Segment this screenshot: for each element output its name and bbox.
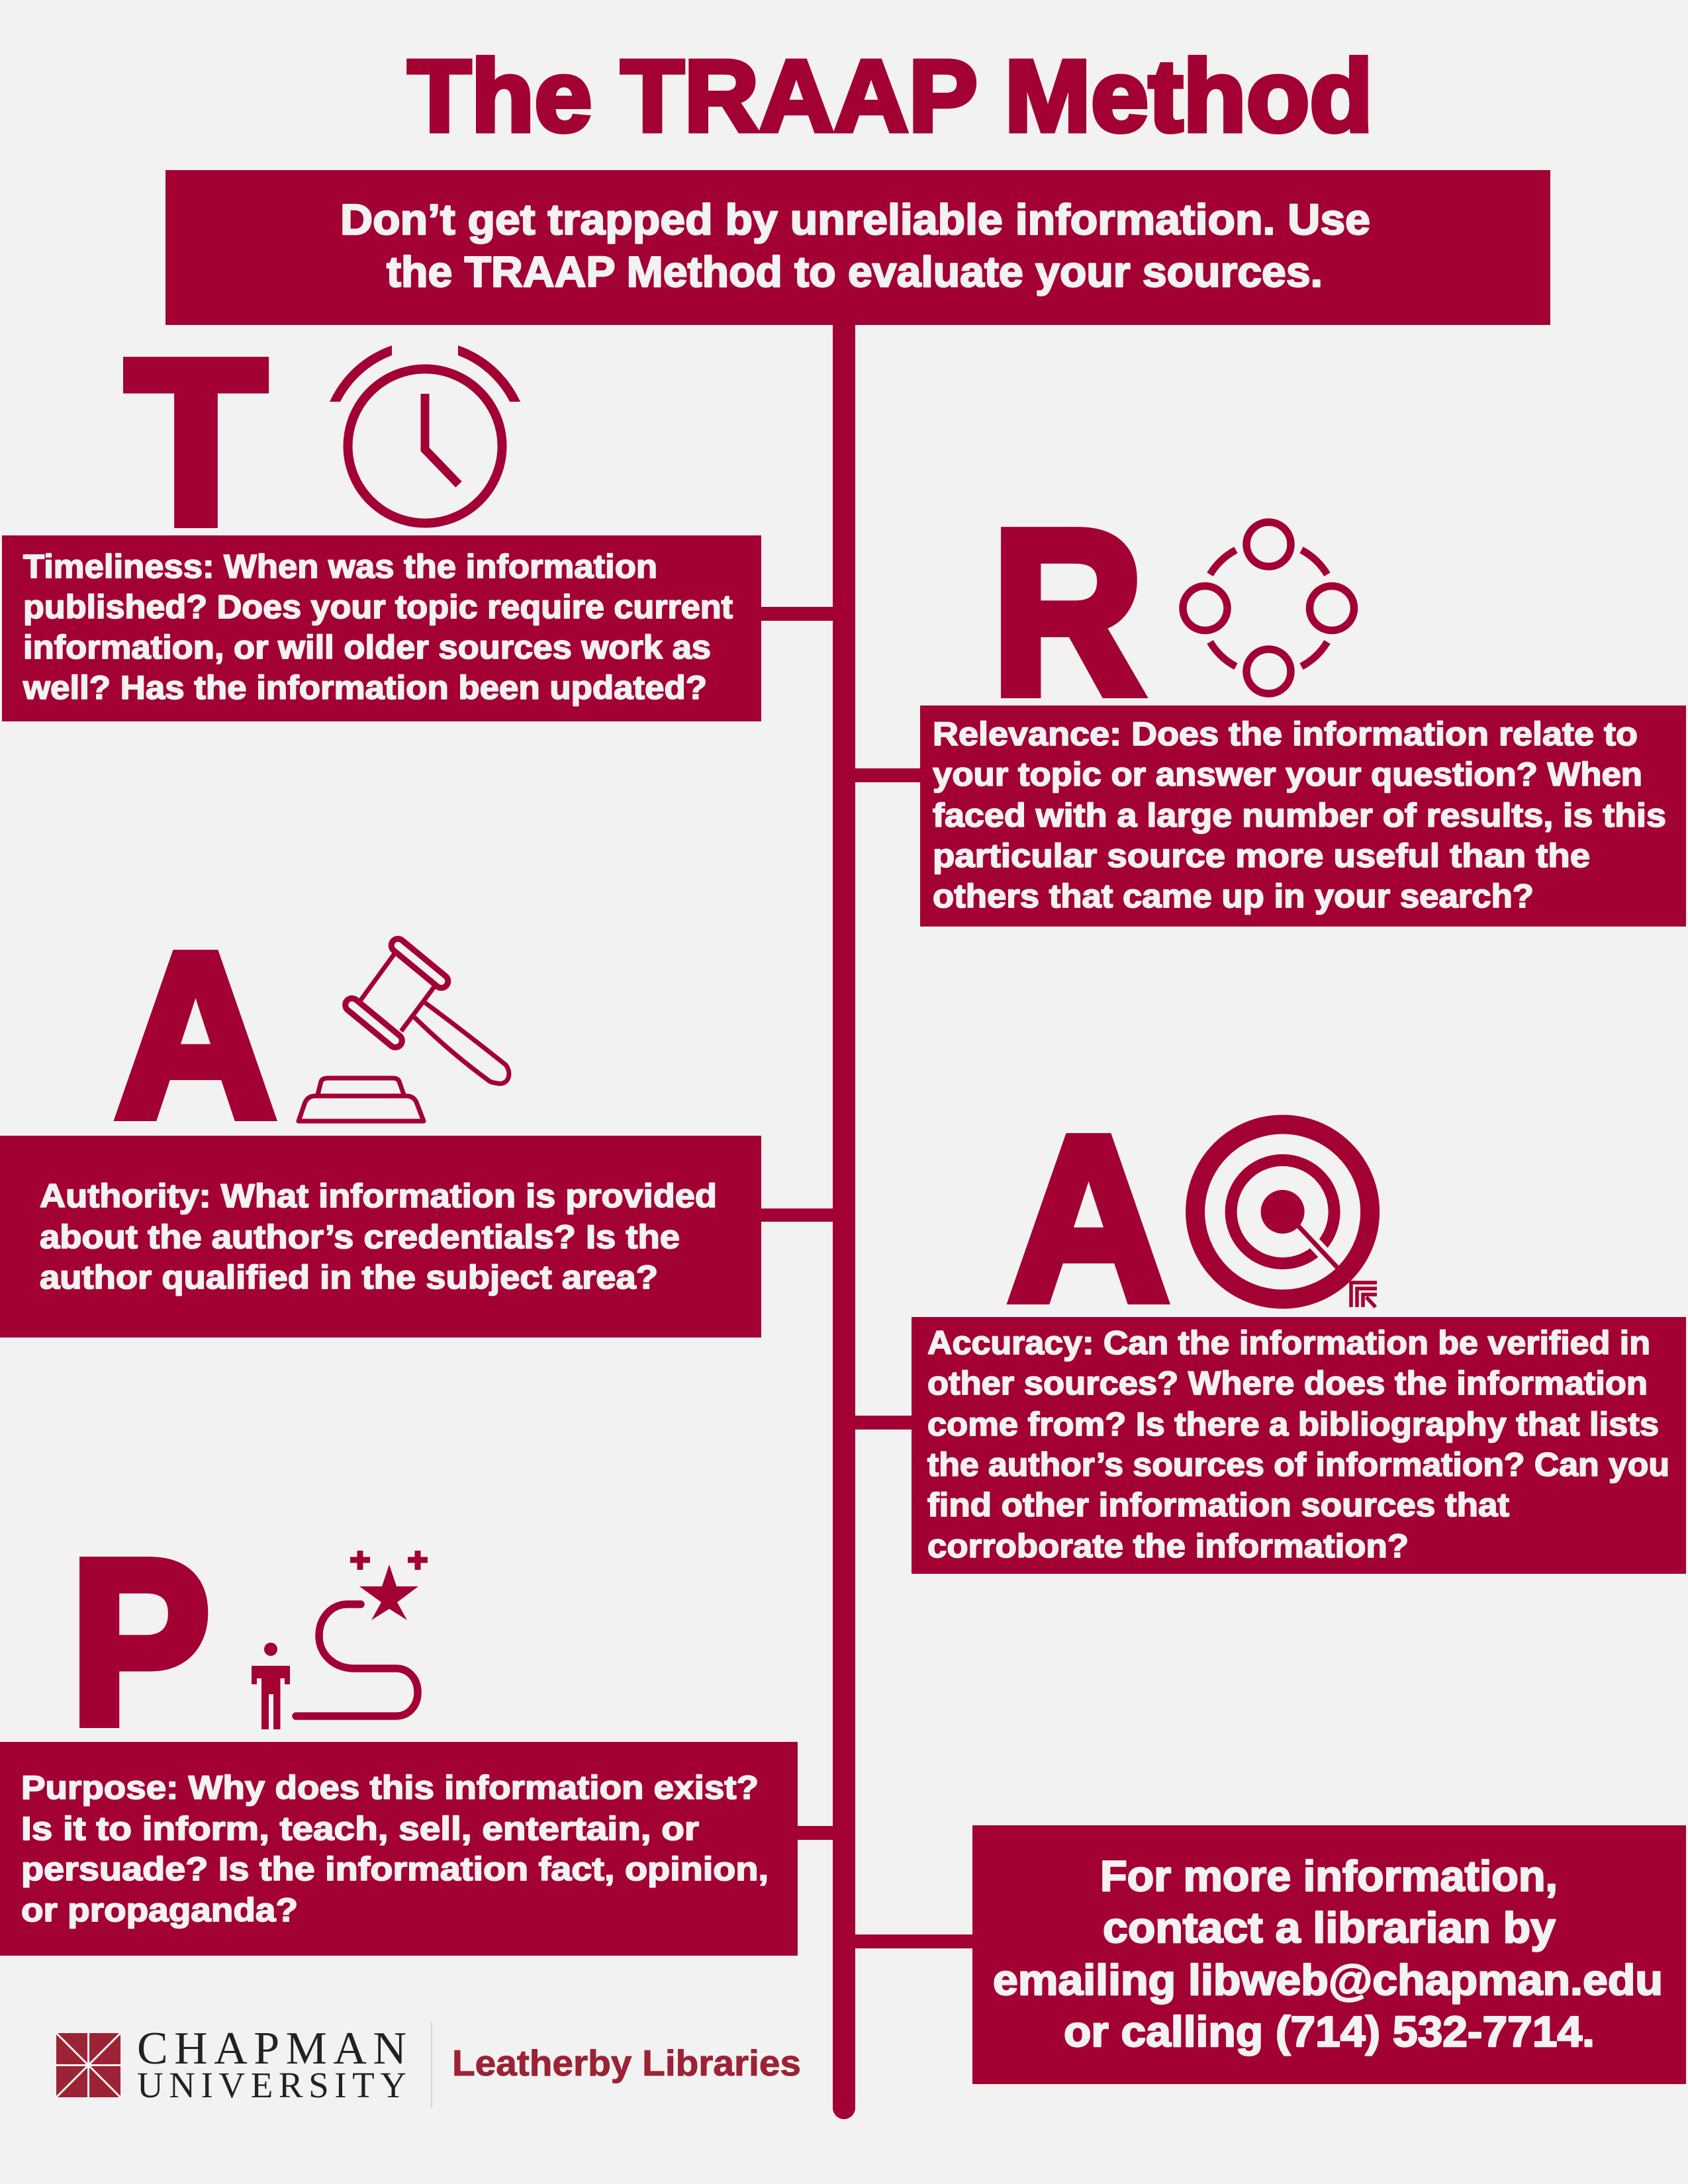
panel: contact	[855, 1825, 1686, 2084]
purpose text: or propaganda?	[21, 1891, 298, 1929]
accuracy text: find other information sources that	[927, 1486, 1509, 1524]
panel: relevance	[855, 481, 1686, 927]
relevance text: faced with a large number of results, is this	[933, 797, 1666, 834]
connector	[761, 607, 833, 621]
intro text	[340, 195, 1370, 296]
letter T: T	[126, 311, 266, 572]
timeliness text: well? Has the information been updated?	[23, 669, 707, 706]
contact text: or calling (714) 532-7714.	[1064, 2007, 1595, 2056]
intro banner background	[165, 170, 1550, 325]
letter R: R	[992, 481, 1144, 743]
logo: Chapman University	[56, 2023, 406, 2105]
logo mark	[56, 2033, 120, 2097]
relevance text: your topic or answer your question? When	[933, 756, 1642, 793]
purpose box	[0, 1742, 798, 1956]
connector	[855, 1934, 973, 1948]
letter A: A	[115, 904, 276, 1165]
timeliness text: information, or will older sources work as	[23, 629, 711, 666]
contact box	[972, 1825, 1686, 2084]
wordmark: UNIVERSITY	[137, 2065, 406, 2105]
connector	[855, 768, 921, 782]
purpose text: Purpose: Why does this information exist?	[21, 1769, 759, 1806]
accuracy text	[927, 1324, 1669, 1565]
connector	[797, 1826, 833, 1840]
wordmark	[137, 2023, 406, 2105]
accuracy text: other sources? Where does the information	[927, 1365, 1648, 1402]
purpose text: persuade? Is the information fact, opinion,	[21, 1850, 769, 1888]
timeliness text: Timeliness: When was the information	[23, 548, 657, 585]
intro text: Don’t get trapped by unreliable information. Use	[340, 195, 1370, 244]
authority text	[40, 1177, 717, 1296]
relevance text	[933, 715, 1666, 915]
contact text	[993, 1852, 1663, 2056]
authority box	[0, 1136, 761, 1338]
contact text: For more information,	[1100, 1852, 1558, 1900]
purpose text	[21, 1769, 769, 1929]
relevance text: others that came up in your search?	[933, 878, 1534, 915]
connector	[761, 1208, 833, 1222]
authority text: author qualified in the subject area?	[40, 1259, 658, 1296]
intro text: the TRAAP Method to evaluate your sources.	[387, 248, 1323, 296]
accuracy text: come from? Is there a bibliography that lists	[927, 1406, 1659, 1443]
accuracy text: the author’s sources of information? Can you	[927, 1446, 1669, 1483]
icon: alarm clock	[330, 345, 520, 523]
relevance text: Relevance: Does the information relate to	[933, 715, 1638, 752]
authority text: about the author’s credentials? Is the	[40, 1218, 680, 1255]
panel: intro banner	[165, 170, 1550, 325]
icon: person following path to star	[252, 1551, 428, 1729]
timeliness box	[2, 535, 761, 721]
letter P: P	[70, 1511, 211, 1772]
panel: purpose	[0, 1511, 833, 1956]
timeliness text	[23, 548, 733, 706]
accuracy text: Accuracy: Can the information be verified in	[927, 1324, 1650, 1361]
wordmark: CHAPMAN	[137, 2023, 406, 2074]
icon: gavel	[299, 936, 509, 1121]
panel: timeliness	[2, 311, 833, 721]
purpose text: Is it to inform, teach, sell, entertain, or	[21, 1810, 699, 1847]
title: The TRAAP Method	[408, 39, 1373, 153]
timeliness text: published? Does your topic require current	[23, 588, 733, 625]
authority text: Authority: What information is provided	[40, 1177, 717, 1214]
contact text: contact a librarian by	[1103, 1903, 1556, 1952]
accuracy text: corroborate the information?	[927, 1527, 1409, 1565]
icon: target with arrow	[1196, 1124, 1377, 1307]
letter A: A	[1008, 1087, 1169, 1349]
library name: Leatherby Libraries	[452, 2042, 801, 2083]
relevance text: particular source more useful than the	[933, 837, 1590, 874]
icon: cycle of circles	[1183, 522, 1354, 694]
panel: authority	[0, 904, 833, 1338]
accuracy box	[912, 1317, 1686, 1574]
panel: accuracy	[855, 1087, 1686, 1574]
timeline spine	[833, 311, 855, 2119]
connector	[855, 1416, 912, 1430]
relevance box	[920, 705, 1686, 927]
contact text: emailing libweb@chapman.edu	[993, 1956, 1663, 2004]
